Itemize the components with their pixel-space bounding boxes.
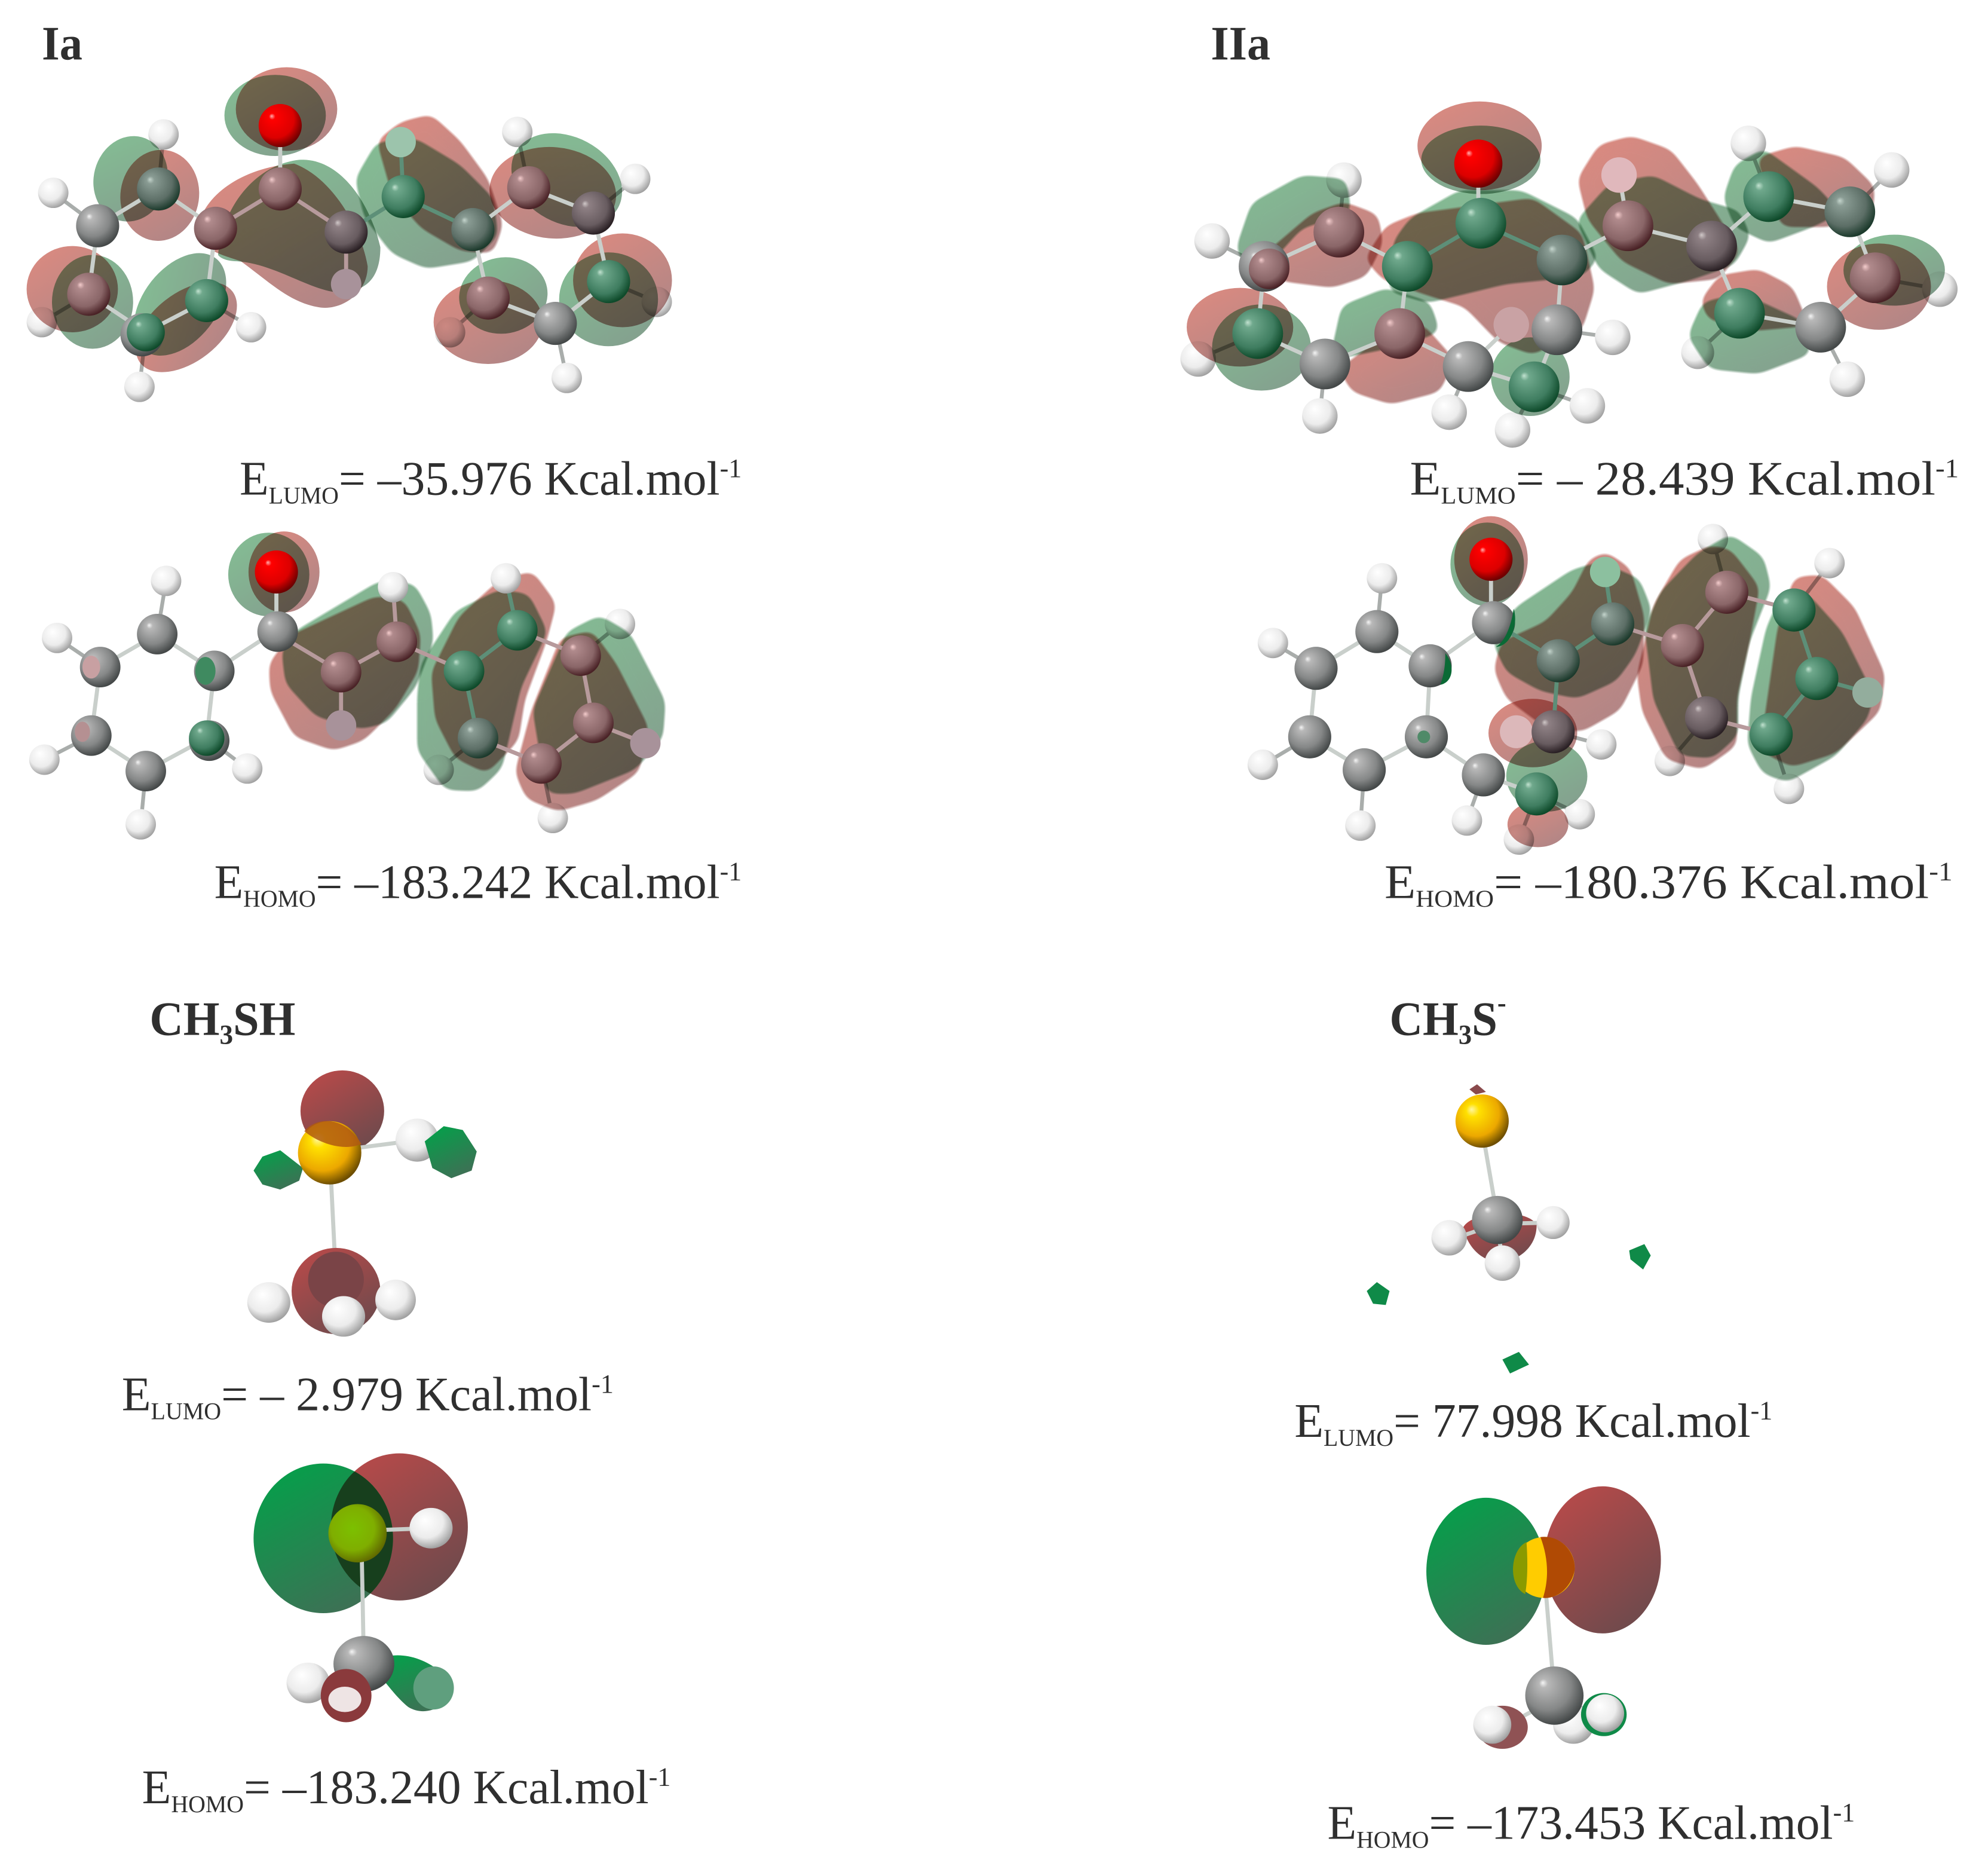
molecule: CH3S- LUMO orbitals — [1367, 1084, 1651, 1373]
energy label: IIa LUMO: E — [1410, 452, 1439, 506]
heading: CH3S-: - — [1497, 987, 1506, 1018]
molecule: Ia HOMO orbitals — [29, 531, 666, 840]
energy label: CH3SH LUMO: E — [122, 1368, 151, 1421]
panel: CH3SH — [122, 992, 670, 1818]
energy label: IIa HOMO: HOMO — [1416, 885, 1494, 912]
energy label: CH3S- HOMO: -1 — [1833, 1797, 1855, 1827]
energy label: IIa HOMO: = –180.376 Kcal.mol — [1494, 855, 1929, 908]
heading: CH3S-: CH — [1390, 992, 1462, 1045]
energy label: Ia LUMO: = –35.976 Kcal.mol — [339, 452, 720, 506]
energy label: IIa HOMO: E — [1384, 855, 1414, 908]
energy label: Ia LUMO: E — [240, 452, 269, 506]
heading: CH3S-: 3 — [1459, 1019, 1472, 1050]
energy label: CH3SH HOMO: = –183.240 Kcal.mol — [244, 1761, 649, 1814]
energy label: CH3S- LUMO: -1 — [1751, 1395, 1772, 1425]
molecule: CH3SH HOMO orbitals — [253, 1454, 468, 1722]
panel: CH3S- — [1294, 987, 1855, 1853]
molecule: IIa HOMO orbitals — [1248, 516, 1885, 855]
molecule: CH3SH LUMO orbitals — [247, 1070, 477, 1336]
molecule: Ia LUMO orbitals — [27, 67, 672, 402]
energy label: Ia HOMO: E — [215, 855, 244, 908]
energy label: CH3SH LUMO: -1 — [592, 1369, 614, 1399]
heading: CH3S-: S — [1472, 992, 1497, 1045]
energy label: CH3SH LUMO: = – 2.979 Kcal.mol — [221, 1368, 592, 1421]
energy label: CH3S- HOMO: E — [1328, 1797, 1357, 1850]
energy label: CH3S- HOMO: = –173.453 Kcal.mol — [1429, 1797, 1833, 1850]
energy label: IIa LUMO: -1 — [1935, 453, 1959, 483]
molecule: CH3S- HOMO orbitals — [1426, 1486, 1661, 1749]
energy label: CH3S- HOMO: HOMO — [1356, 1827, 1429, 1853]
heading: IIa: IIa — [1211, 17, 1270, 71]
heading: Ia: Ia — [42, 17, 82, 71]
energy label: Ia LUMO: LUMO — [269, 482, 339, 509]
molecule: IIa LUMO orbitals — [1180, 102, 1958, 448]
energy label: CH3SH HOMO: E — [142, 1761, 171, 1814]
panel: IIa — [1180, 17, 1959, 912]
energy label: Ia HOMO: = –183.242 Kcal.mol — [316, 855, 720, 908]
energy label: CH3S- LUMO: = 77.998 Kcal.mol — [1393, 1394, 1751, 1448]
energy label: IIa LUMO: LUMO — [1441, 482, 1516, 509]
heading: CH3SH: CH — [149, 992, 222, 1045]
energy label: Ia LUMO: -1 — [720, 453, 742, 483]
panel: Ia — [27, 17, 742, 912]
heading: CH3SH: SH — [233, 992, 295, 1045]
energy label: IIa LUMO: = – 28.439 Kcal.mol — [1516, 452, 1935, 506]
energy label: IIa HOMO: -1 — [1929, 856, 1953, 886]
energy label: CH3S- LUMO: LUMO — [1324, 1424, 1393, 1451]
energy label: Ia HOMO: HOMO — [243, 885, 316, 912]
energy label: CH3SH HOMO: -1 — [649, 1762, 670, 1792]
energy label: CH3SH HOMO: HOMO — [171, 1791, 244, 1818]
heading: CH3SH: 3 — [220, 1019, 233, 1050]
energy label: CH3S- LUMO: E — [1294, 1394, 1324, 1448]
energy label: CH3SH LUMO: LUMO — [151, 1397, 221, 1424]
energy label: Ia HOMO: -1 — [720, 856, 742, 886]
